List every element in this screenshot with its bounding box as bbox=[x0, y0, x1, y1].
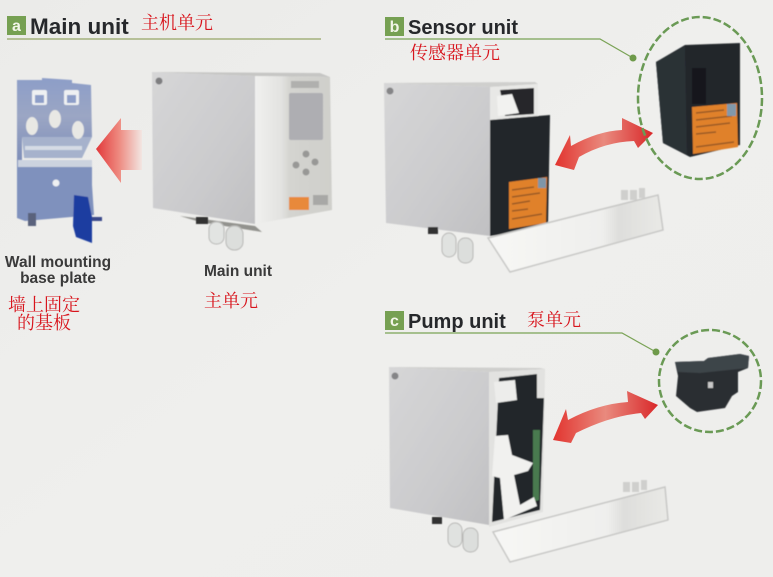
photo: wall mounting base plate bbox=[17, 78, 102, 243]
label: wall mounting base plate: Wall mounting bbox=[5, 254, 111, 271]
heading: Pump unit: Pump unit bbox=[408, 311, 506, 333]
label: wall mounting base plate: 的基板 bbox=[17, 313, 71, 333]
heading: Main unit: 主机单元 bbox=[141, 13, 213, 33]
heading: Sensor unit: 传感器单元 bbox=[410, 43, 500, 63]
heading: Pump unit: c bbox=[390, 313, 399, 330]
arrow: sensor unit swap bbox=[555, 118, 653, 170]
heading: Main unit: a bbox=[12, 18, 21, 35]
heading: Sensor unit: Sensor unit bbox=[408, 17, 518, 39]
arrow: mount onto base plate bbox=[96, 118, 142, 183]
label: wall mounting base plate bbox=[5, 254, 111, 333]
photo: main unit with pump unit bbox=[389, 367, 668, 562]
heading: Sensor unit bbox=[385, 17, 636, 63]
heading: Pump unit: 泵单元 bbox=[527, 310, 581, 330]
label: wall mounting base plate: base plate bbox=[20, 270, 96, 287]
callout: sensor unit detail bbox=[638, 17, 762, 179]
arrow: pump unit swap bbox=[553, 391, 658, 443]
label: main unit bbox=[204, 263, 272, 311]
photo: main unit bbox=[152, 72, 332, 250]
heading: Pump unit bbox=[385, 310, 660, 356]
label: main unit: Main unit bbox=[204, 263, 272, 280]
heading: Main unit bbox=[7, 13, 321, 39]
callout: pump unit detail bbox=[659, 330, 761, 432]
heading: Sensor unit: b bbox=[390, 19, 400, 36]
photo: main unit with sensor unit bbox=[384, 82, 663, 272]
label: main unit: 主单元 bbox=[204, 291, 258, 311]
label: wall mounting base plate: 墙上固定 bbox=[8, 295, 80, 315]
heading: Main unit: Main unit bbox=[30, 14, 129, 39]
